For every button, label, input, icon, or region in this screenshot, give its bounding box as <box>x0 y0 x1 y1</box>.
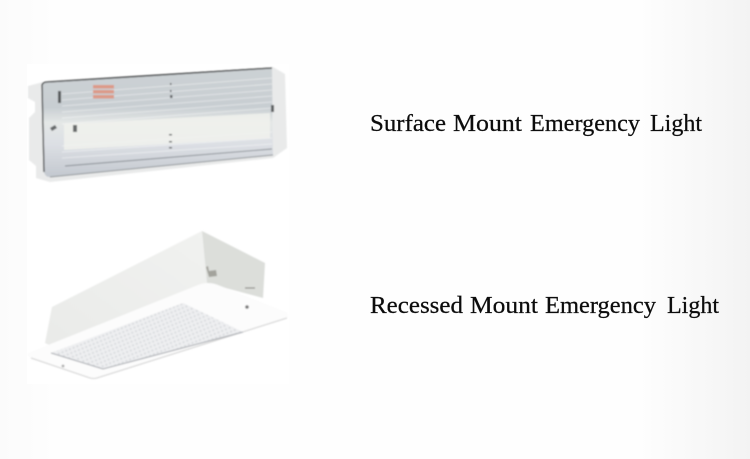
label: surface mount emergency light: Mount <box>453 110 522 137</box>
red label <box>93 85 114 98</box>
label: surface mount emergency light: Light <box>650 110 702 137</box>
label: recessed mount emergency light: Recessed <box>370 292 463 319</box>
icon: surface mount emergency light <box>28 67 287 182</box>
dark top and left border <box>42 68 272 172</box>
screws <box>245 305 249 309</box>
box end <box>202 231 265 298</box>
box long side <box>45 231 207 350</box>
right clip <box>271 105 274 112</box>
panel front edge <box>51 332 243 369</box>
center marks <box>169 83 172 148</box>
diffuser panel <box>51 303 243 369</box>
dark lower rib <box>65 149 272 166</box>
housing <box>28 67 287 182</box>
flange lower edge <box>31 318 287 378</box>
bottom border <box>50 155 273 177</box>
label: recessed mount emergency light: Mount <box>470 292 538 319</box>
photo backdrop white <box>27 64 289 384</box>
lens <box>42 68 273 177</box>
tube highlight <box>64 113 270 150</box>
bracket <box>206 266 217 277</box>
flange <box>27 283 288 378</box>
label: surface mount emergency light: Emergency <box>530 110 641 137</box>
label: recessed mount emergency light: Emergency <box>545 292 657 319</box>
icon: recessed mount emergency light <box>27 231 288 378</box>
label mark <box>245 287 255 289</box>
label: surface mount emergency light: Surface <box>370 110 446 137</box>
ribs on lens <box>62 78 272 158</box>
label: recessed mount emergency light: Light <box>667 292 719 319</box>
left clips <box>58 91 61 103</box>
